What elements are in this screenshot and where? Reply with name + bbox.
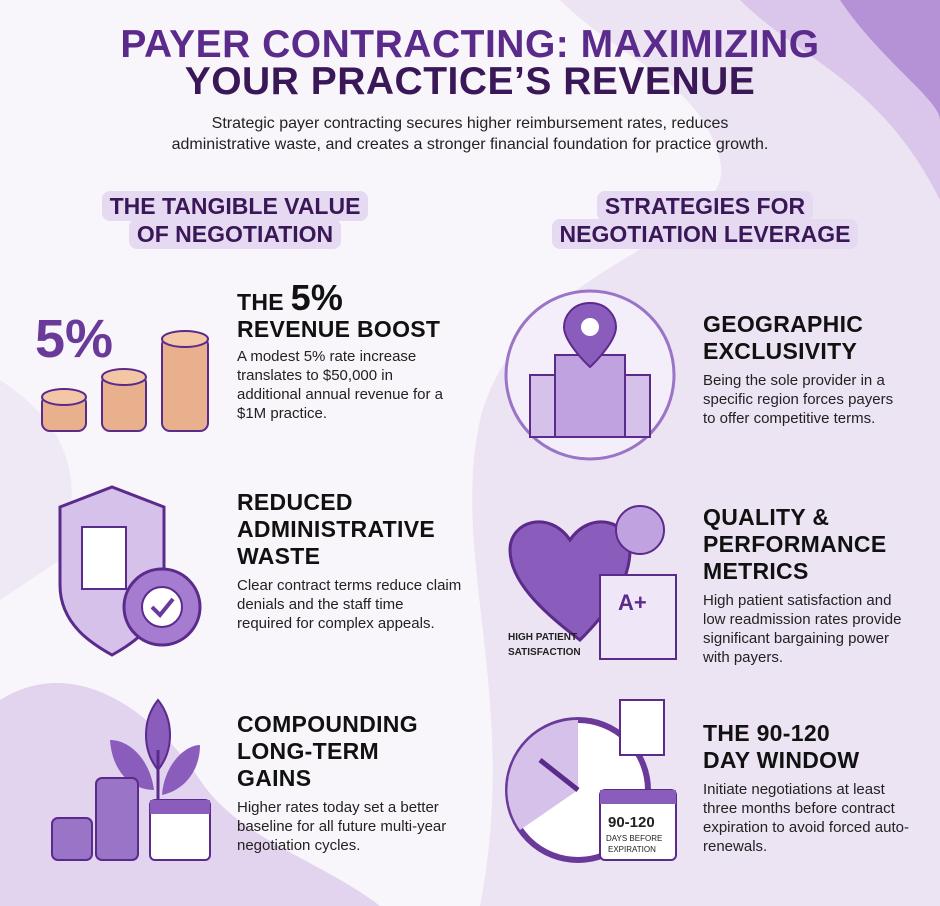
- text: quality metrics: [703, 504, 901, 666]
- text: reduced admin waste: REDUCED: [237, 489, 353, 515]
- icon: building pin: [504, 290, 676, 460]
- text: compounding gains: Higher rates today set a better baseline for all future multi-year negotiation cycles.: [237, 799, 446, 854]
- text: geographic exclusivity: GEOGRAPHIC: [703, 311, 863, 337]
- text: compounding gains: LONG-TERM: [237, 738, 379, 764]
- text: 5% revenue boost: REVENUE BOOST: [237, 316, 440, 342]
- subtitle: Strategic payer contracting secures higher reimbursement rates, reduces: [212, 115, 728, 132]
- section heading: strategies: [552, 191, 858, 249]
- text: compounding gains: GAINS: [237, 765, 311, 791]
- text: 5% revenue boost: [237, 277, 443, 422]
- icon: 5% coins: 5%: [35, 309, 113, 369]
- text: geographic exclusivity: Being the sole provider in a specific region forces payers to offer competitive terms.: [703, 372, 893, 427]
- title: [120, 23, 820, 103]
- text: quality metrics: High patient satisfaction and low readmission rates provide significant bargaining power with payers.: [703, 592, 901, 666]
- text: geographic exclusivity: [703, 311, 893, 427]
- section heading: strategies: NEGOTIATION LEVERAGE: [560, 221, 850, 247]
- section heading: strategies: STRATEGIES FOR: [605, 193, 805, 219]
- icon: heart and certificate: [508, 505, 677, 660]
- icon: shield gear: [58, 485, 202, 657]
- text: 90-120 day window: THE 90-120: [703, 720, 830, 746]
- icon: clock calendar: DAYS BEFORE: [606, 834, 662, 843]
- section heading: tangible value: [102, 191, 368, 249]
- text: reduced admin waste: Clear contract terms reduce claim denials and the staff time required for complex appeals.: [237, 577, 461, 632]
- icon: heart and certificate: HIGH PATIENT: [508, 632, 577, 643]
- icon: heart and certificate: SATISFACTION: [508, 647, 581, 658]
- text: reduced admin waste: ADMINISTRATIVE: [237, 516, 435, 542]
- text: geographic exclusivity: EXCLUSIVITY: [703, 338, 857, 364]
- section heading: tangible value: OF NEGOTIATION: [137, 221, 333, 247]
- icon: heart and certificate: A+: [618, 590, 647, 615]
- icon: plant coins calendar: [51, 698, 211, 861]
- text: compounding gains: COMPOUNDING: [237, 711, 418, 737]
- title: YOUR PRACTICE’S REVENUE: [185, 60, 755, 103]
- subtitle: [172, 115, 768, 153]
- icon: clock calendar: 90-120: [608, 814, 655, 831]
- text: reduced admin waste: [237, 489, 461, 632]
- text: quality metrics: PERFORMANCE: [703, 531, 886, 557]
- text: 90-120 day window: [703, 720, 909, 855]
- text: 90-120 day window: DAY WINDOW: [703, 747, 859, 773]
- icon: clock calendar: EXPIRATION: [608, 845, 656, 854]
- text: 90-120 day window: Initiate negotiations at least three months before contract expiration to avoid forced auto-renewals.: [703, 781, 909, 855]
- subtitle: administrative waste, and creates a stronger financial foundation for practice growth.: [172, 136, 768, 153]
- text: reduced admin waste: WASTE: [237, 543, 320, 569]
- section heading: tangible value: THE TANGIBLE VALUE: [110, 193, 360, 219]
- text: quality metrics: QUALITY &: [703, 504, 829, 530]
- text: 5% revenue boost: THE 5%: [237, 277, 343, 318]
- text: compounding gains: [237, 711, 446, 854]
- icon: clock calendar: [505, 699, 677, 863]
- text: quality metrics: METRICS: [703, 558, 809, 584]
- icon: 5% coins: [35, 309, 209, 432]
- title: PAYER CONTRACTING: MAXIMIZING: [120, 23, 820, 66]
- text: 5% revenue boost: A modest 5% rate increase translates to $50,000 in additional annual revenue for a $1M practice.: [237, 348, 443, 422]
